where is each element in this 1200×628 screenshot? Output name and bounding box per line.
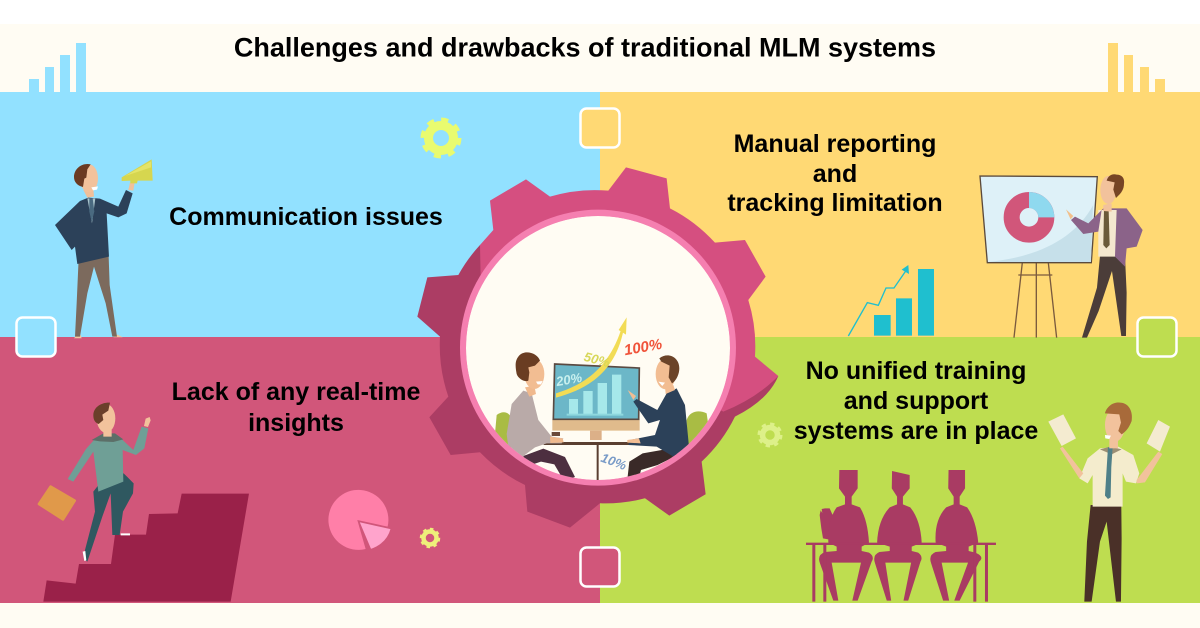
- label: 50%: 50%: [582, 349, 612, 370]
- title: Challenges and drawbacks of traditional MLM systems: [234, 32, 936, 62]
- icon: yellow bars top right: [1108, 43, 1165, 93]
- heading: training and support: No unified training: [806, 357, 1026, 385]
- rounded square top: [580, 108, 620, 148]
- icon: pie chart: [328, 490, 391, 550]
- chairs: [495, 411, 708, 448]
- icon: gear bottom: [421, 529, 439, 547]
- man: [1082, 256, 1127, 338]
- gear shadow: [417, 245, 778, 528]
- label: 10%: 10%: [599, 450, 629, 473]
- heading: manual reporting: and: [813, 160, 857, 188]
- heading: manual reporting: Manual reporting: [734, 130, 936, 158]
- central gear: [417, 167, 778, 528]
- icon: blue bars top left: [29, 43, 86, 93]
- papers: [1048, 414, 1076, 446]
- monitor: [552, 419, 640, 431]
- heading: real-time insights: insights: [248, 409, 344, 437]
- board: [980, 176, 1097, 263]
- panel: communication issues: [0, 92, 600, 337]
- staircase: [43, 494, 249, 602]
- right man: [628, 448, 678, 477]
- figure: people silhouettes at table: [806, 470, 996, 602]
- rounded square right: [1138, 318, 1176, 356]
- briefcase: [39, 487, 75, 519]
- ring: [460, 210, 736, 486]
- panel: manual reporting: [600, 92, 1200, 337]
- panel: training and support: [600, 337, 1200, 603]
- left man: [523, 449, 575, 480]
- heading: real-time insights: Lack of any real-time: [172, 378, 420, 406]
- heading: communication issues: Communication issues: [169, 203, 443, 231]
- rounded square bottom: [580, 548, 620, 586]
- gear body: [480, 167, 778, 412]
- heading: training and support: and support: [844, 387, 989, 415]
- center circle scene: [466, 216, 730, 480]
- figure: rising bar chart: [848, 265, 934, 336]
- figure: man with papers: [1048, 403, 1170, 602]
- rising arrow: [556, 329, 624, 398]
- icon: gear top: [423, 120, 459, 156]
- donut chart: [1012, 192, 1054, 235]
- easel: [1014, 263, 1057, 338]
- table: [544, 442, 630, 480]
- rounded square left: [16, 318, 56, 356]
- label: 20%: 20%: [554, 370, 584, 389]
- heading: training and support: systems are in place: [794, 417, 1038, 445]
- panel: real-time insights: [0, 337, 600, 603]
- figure: man climbing stairs: [39, 403, 249, 602]
- figure: presenter with board: [980, 174, 1143, 338]
- heading: manual reporting: tracking limitation: [727, 189, 943, 217]
- label: 100%: 100%: [623, 336, 663, 359]
- figure: man with megaphone: [55, 159, 153, 338]
- icon: gear right: [759, 424, 781, 446]
